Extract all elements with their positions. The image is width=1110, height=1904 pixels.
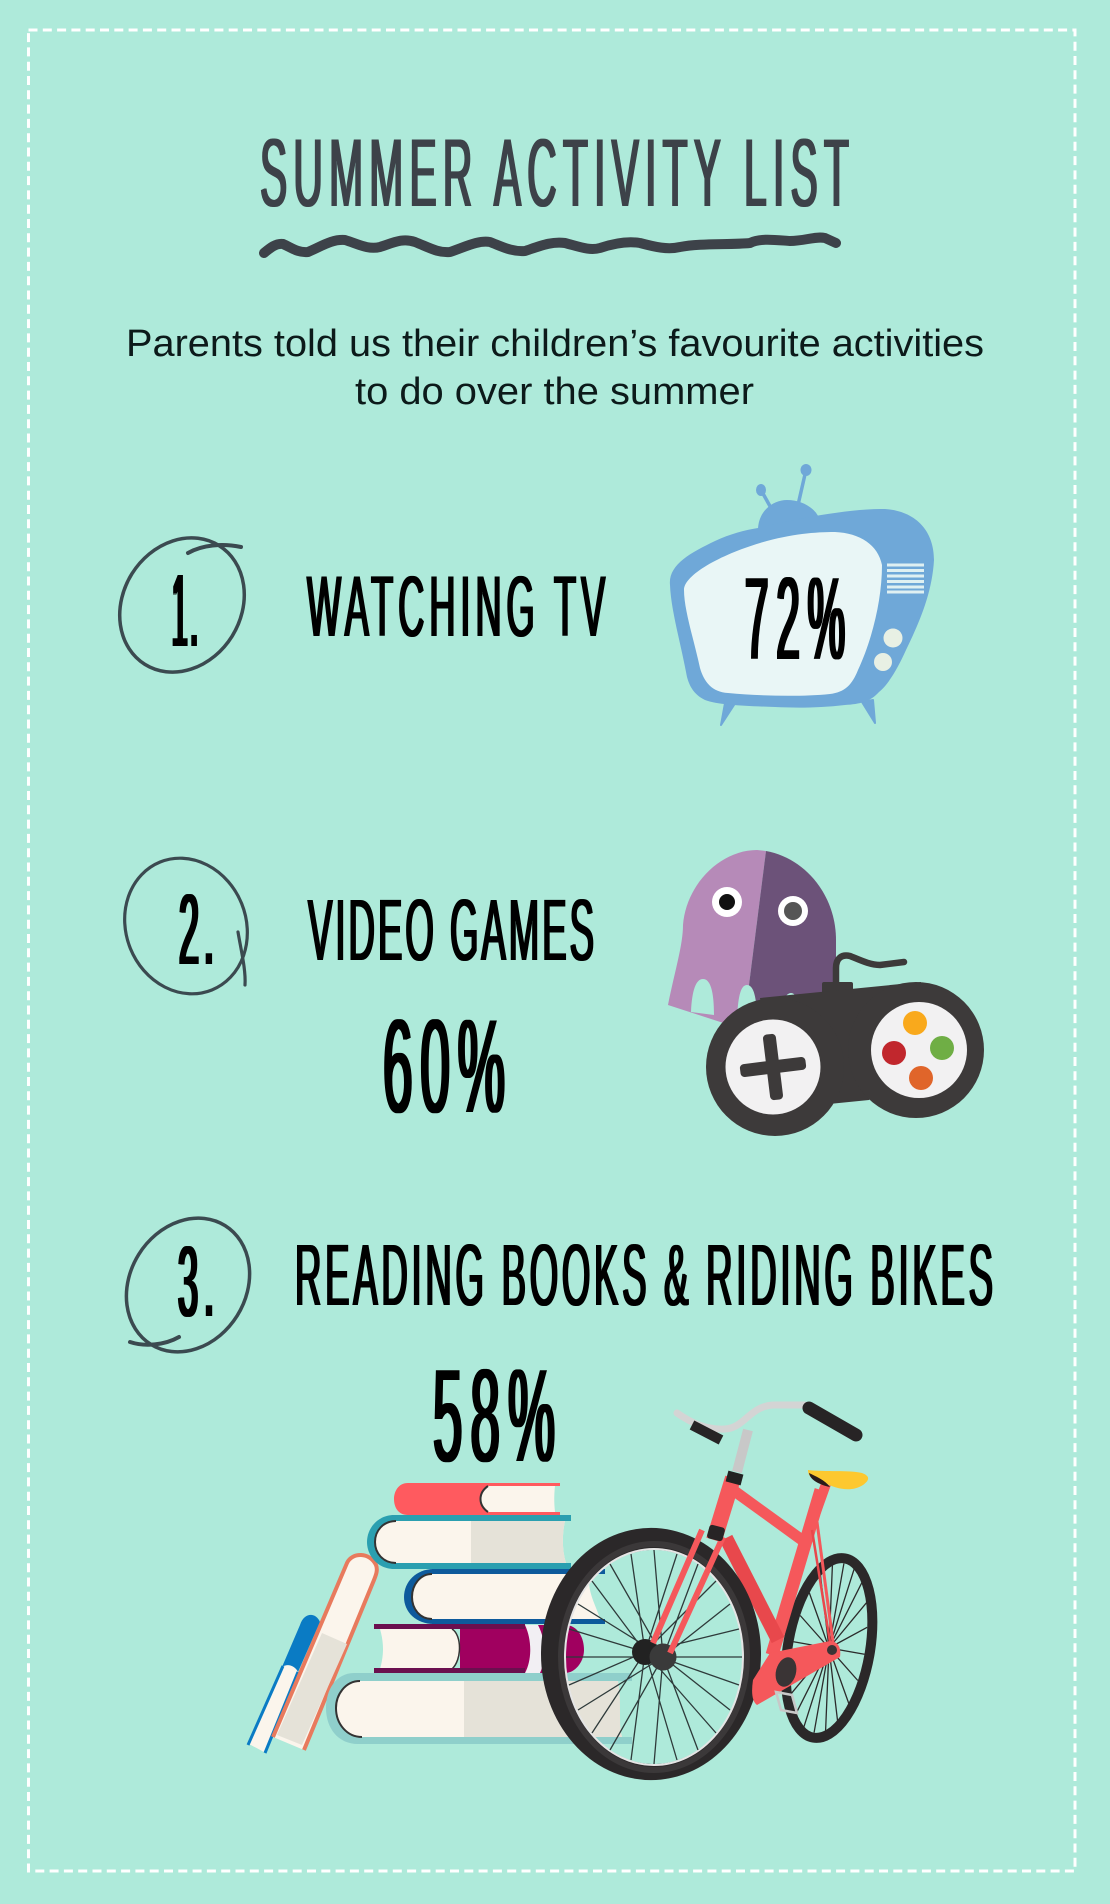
intro text: Parents told us their children’s favourite activities	[126, 323, 984, 365]
title: SUMMER ACTIVITY LIST	[260, 119, 849, 227]
chain guard	[752, 1641, 840, 1713]
handlebar and stem	[677, 1405, 856, 1480]
stat: 60%: 60%	[383, 993, 505, 1141]
icon: purple ghost	[668, 850, 836, 1030]
item 1: watching tv	[95, 464, 934, 725]
icon: game controller	[706, 956, 984, 1136]
teal book	[367, 1515, 571, 1569]
stat: 72%: 72%	[745, 553, 845, 684]
bottom book	[326, 1673, 632, 1744]
front wheel	[541, 1528, 761, 1780]
item 2: video games	[105, 840, 984, 1141]
front fork	[653, 1524, 726, 1653]
heading: reading books and riding bikes: READING BOOKS & RIDING BIKES	[295, 1228, 993, 1325]
heading: watching tv: WATCHING TV	[307, 558, 605, 654]
heading: video games: VIDEO GAMES	[308, 883, 594, 980]
blue leaning book	[248, 1615, 320, 1753]
orange leaning book	[273, 1555, 377, 1750]
purple book	[374, 1624, 584, 1673]
number badge 2: 2.	[179, 874, 214, 985]
icon: bicycle	[541, 1405, 885, 1780]
intro text	[126, 323, 984, 413]
saddle	[808, 1470, 868, 1489]
number badge 3: 3.	[178, 1226, 214, 1337]
intro text: to do over the summer	[355, 371, 754, 413]
blue book	[404, 1569, 605, 1624]
number badge 3	[102, 1195, 274, 1375]
red book	[394, 1483, 560, 1515]
rear wheel	[773, 1551, 885, 1745]
number badge 2	[105, 840, 267, 1012]
title wavy underline	[264, 238, 836, 253]
number badge 1: 1.	[172, 553, 198, 668]
number badge 1	[95, 514, 269, 696]
icon: television	[670, 464, 934, 725]
stat: 58%: 58%	[433, 1343, 555, 1490]
icon: book stack	[248, 1483, 632, 1753]
item 3: reading books and riding bikes	[102, 1195, 993, 1780]
bicycle frame	[714, 1478, 833, 1655]
